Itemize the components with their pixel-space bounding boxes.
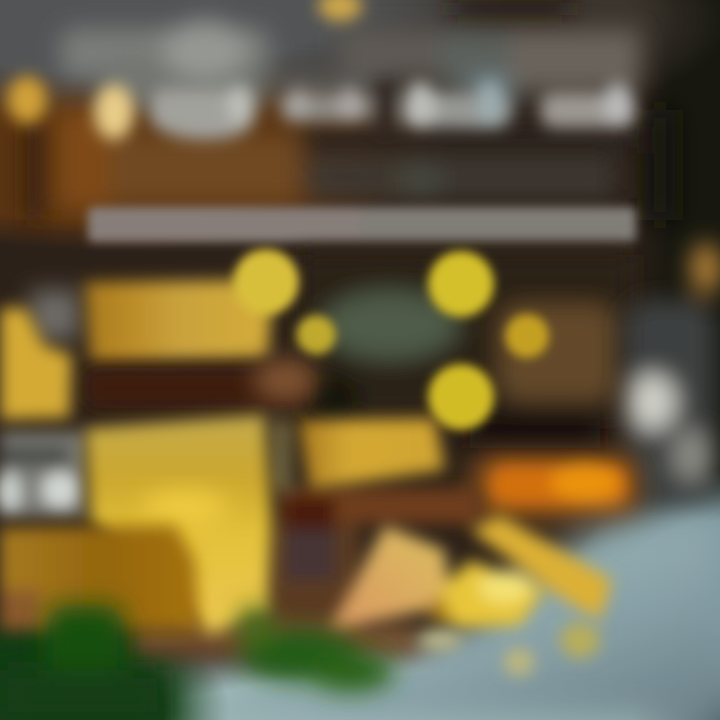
cheese block: lower left — [0, 525, 200, 632]
wooden boards under cheese — [85, 368, 480, 640]
glowing lights top left — [7, 0, 362, 140]
cheese crumbs on table — [418, 622, 600, 676]
cheese block: upper left — [85, 280, 272, 362]
headline row: blurred white letters — [150, 80, 636, 140]
left grey jar — [0, 432, 85, 517]
orange cheese wedge — [470, 452, 640, 522]
top banner: blurred headline band — [60, 20, 640, 115]
cheese wedges: front right — [328, 515, 612, 632]
cheese block: centre — [298, 418, 445, 490]
grey subtitle bar — [88, 207, 636, 242]
cheese block highlight — [143, 490, 227, 526]
mid background: dark recess and jars — [30, 255, 630, 448]
cheese block: large front — [85, 414, 272, 635]
yellow glowing dots — [233, 249, 549, 430]
back shelves — [26, 0, 675, 220]
green herb garnish — [0, 605, 394, 720]
cheese block: far left — [0, 308, 72, 420]
table surface — [190, 515, 720, 720]
wooden board lower strip — [130, 358, 420, 655]
right-hand dark bottle — [625, 242, 720, 505]
orange cheese highlight — [488, 462, 628, 506]
